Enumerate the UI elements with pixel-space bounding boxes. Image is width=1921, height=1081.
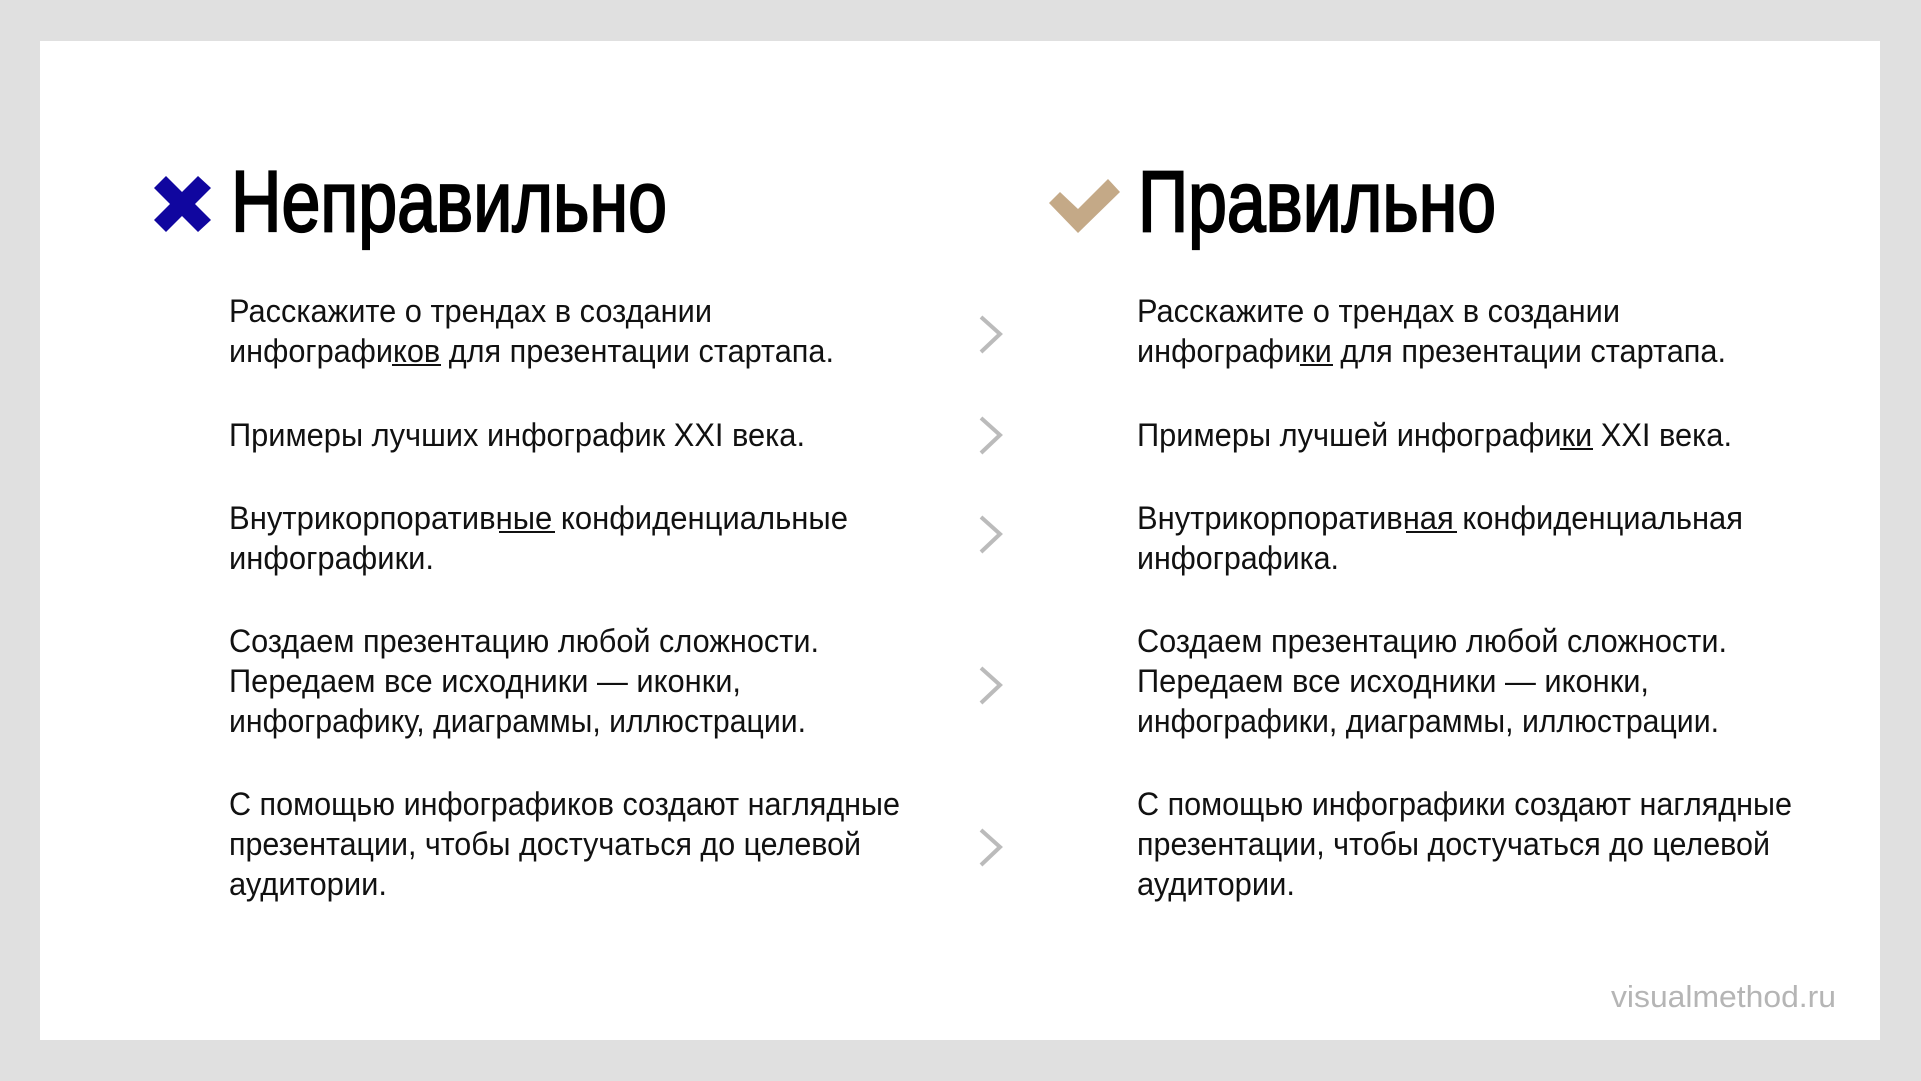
- heading: wrong: Неправильно: [231, 154, 667, 250]
- text block: right 1: Расскажите о трендах в создании: [1137, 293, 1620, 329]
- text block: right 2: Примеры лучшей инфографики XXI века.: [1137, 417, 1732, 453]
- text block: right 1: инфографики для презентации стартапа.: [1137, 333, 1726, 369]
- text block: wrong 4: инфографику, диаграммы, иллюстрации.: [229, 703, 806, 739]
- text block: wrong 5: С помощью инфографиков создают наглядные: [229, 786, 900, 822]
- text block: right 3: Внутрикорпоративная конфиденциальная: [1137, 500, 1743, 536]
- icon: tan check mark: [1049, 179, 1120, 233]
- text block: right 1: [1137, 293, 1726, 369]
- text block: wrong 1: Расскажите о трендах в создании: [229, 293, 712, 329]
- text block: right 3: инфографика.: [1137, 540, 1339, 576]
- text block: right 4: [1137, 623, 1727, 739]
- arrow 4: [981, 668, 1000, 703]
- heading: right: Правильно: [1138, 154, 1496, 250]
- arrow 3: [981, 517, 1000, 552]
- arrow 1: [981, 317, 1000, 352]
- text block: wrong 5: презентации, чтобы достучаться до целевой: [229, 826, 861, 862]
- text block: right 4: инфографики, диаграммы, иллюстрации.: [1137, 703, 1719, 739]
- icon: blue cross: [154, 176, 211, 232]
- text block: wrong 4: Создаем презентацию любой сложности.: [229, 623, 819, 659]
- text block: wrong 4: [229, 623, 819, 739]
- text block: wrong 5: [229, 786, 900, 902]
- text block: right 4: Создаем презентацию любой сложности.: [1137, 623, 1727, 659]
- text block: right 4: Передаем все исходники — иконки,: [1137, 663, 1649, 699]
- text block: right 5: аудитории.: [1137, 866, 1295, 902]
- text block: right 5: [1137, 786, 1792, 902]
- text block: wrong 3: Внутрикорпоративные конфиденциальные: [229, 500, 848, 536]
- text block: wrong 4: Передаем все исходники — иконки,: [229, 663, 741, 699]
- footer: site name: visualmethod.ru: [1611, 979, 1836, 1014]
- text block: wrong 5: аудитории.: [229, 866, 387, 902]
- text block: right 5: презентации, чтобы достучаться до целевой: [1137, 826, 1770, 862]
- text block: right 3: [1137, 500, 1743, 576]
- text block: wrong 1: [229, 293, 834, 369]
- text block: wrong 3: [229, 500, 848, 576]
- arrow 5: [981, 830, 1000, 865]
- text block: wrong 2: Примеры лучших инфографик XXI века.: [229, 417, 805, 453]
- text block: right 5: С помощью инфографики создают наглядные: [1137, 786, 1792, 822]
- text block: wrong 1: инфографиков для презентации стартапа.: [229, 333, 834, 369]
- text block: wrong 3: инфографики.: [229, 540, 434, 576]
- arrow 2: [981, 418, 1000, 453]
